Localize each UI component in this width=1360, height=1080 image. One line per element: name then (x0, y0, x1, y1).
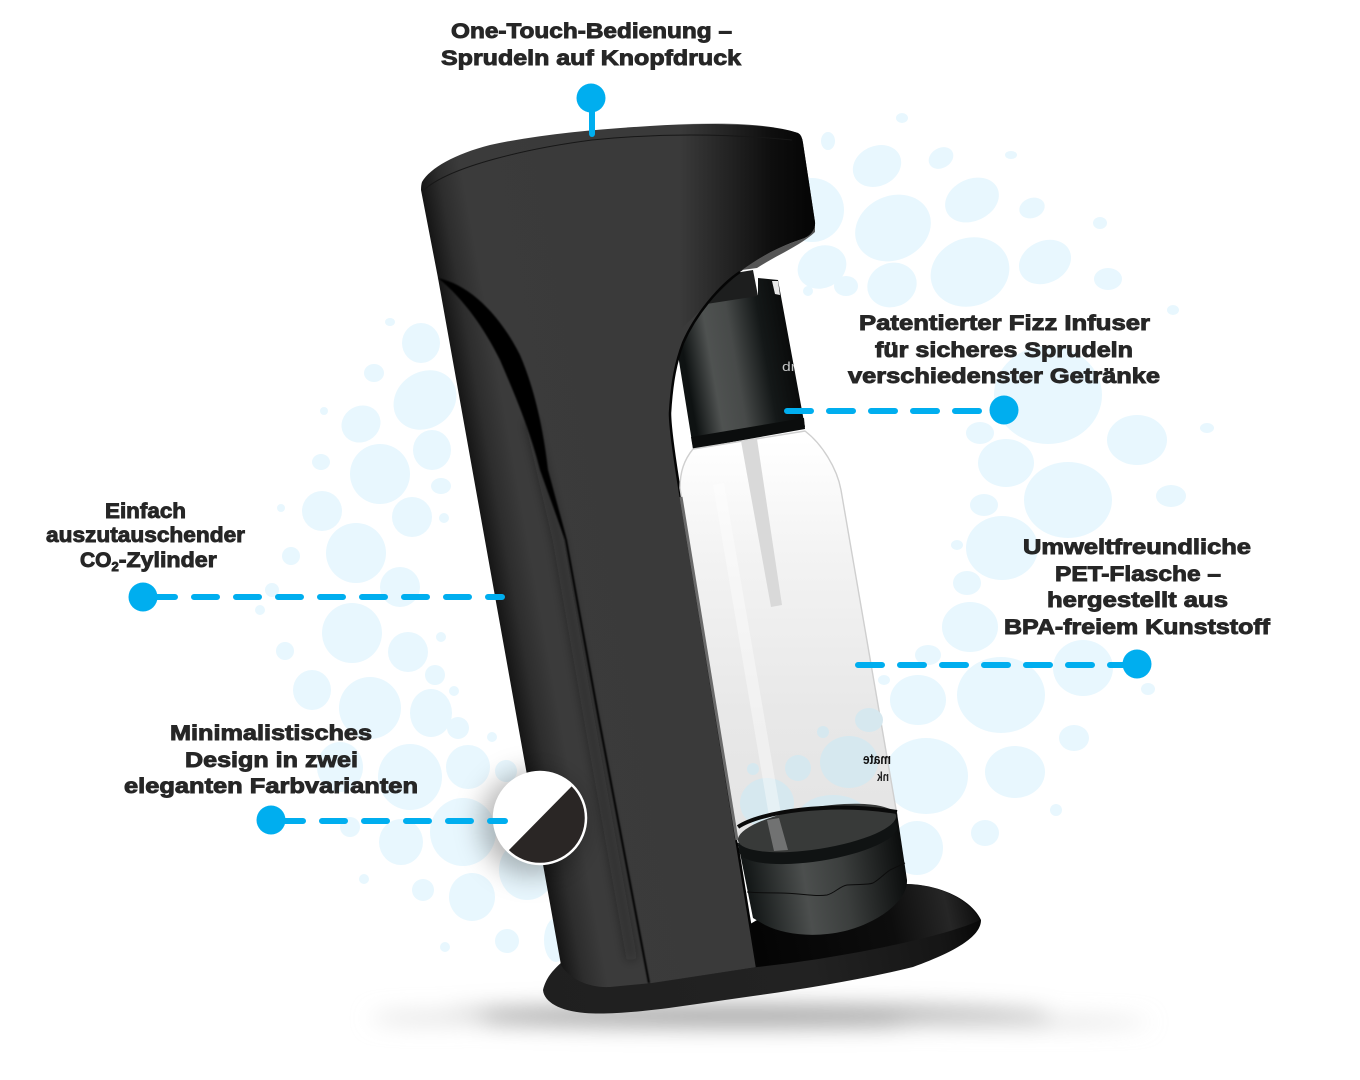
callout: PET bottle (858, 536, 1271, 678)
pointer: design (256, 806, 505, 834)
heading: design (124, 722, 418, 798)
bottle logo: nk (876, 769, 889, 784)
bottle logo (863, 751, 891, 784)
bottle glass (680, 431, 897, 842)
bubbles seen through glass (740, 708, 883, 839)
heading: PET bottle: Umweltfreundliche (1023, 536, 1251, 559)
cup dark band (736, 805, 900, 873)
heading: PET bottle: hergestellt aus (1047, 589, 1228, 612)
ground shadow (370, 1005, 1150, 1027)
bottom cup (738, 813, 907, 935)
bottle cap (678, 270, 805, 448)
heading: CO2 cylinder: Einfach (105, 500, 186, 523)
heading: fizz infuser: verschiedenster Getränke (848, 365, 1160, 388)
cup wave (747, 863, 905, 896)
heading: CO2 cylinder: CO (80, 549, 112, 572)
heading: one-touch: Sprudeln auf Knopfdruck (441, 47, 741, 70)
machine body (421, 124, 815, 987)
bottle inner edge strip (681, 497, 737, 840)
heading: design: Minimalistisches (170, 722, 372, 745)
inner tube (741, 439, 782, 607)
seam soft shadow (530, 420, 632, 960)
heading: fizz infuser: für sicheres Sprudeln (875, 339, 1133, 362)
callout: one-touch (441, 20, 741, 134)
heading: one-touch: One-Touch-Bedienung – (451, 20, 732, 43)
callout: CO2 cylinder (46, 500, 502, 612)
bottle (680, 431, 907, 935)
pointer: fizz infuser (787, 396, 1018, 424)
heading: design: eleganten Farbvarianten (124, 775, 418, 798)
product: soda machine (421, 123, 981, 1014)
base top surface (650, 884, 980, 983)
callout: fizz infuser (787, 312, 1160, 424)
heading: CO2 cylinder: -Zylinder (119, 549, 217, 572)
heading: PET bottle: PET-Flasche – (1055, 563, 1221, 586)
arch inner edge (670, 272, 757, 967)
head top seam (424, 135, 792, 190)
tube streak in lid (767, 818, 788, 851)
heading: CO2 cylinder: auszutauschender (46, 524, 245, 547)
heading: design: Design in zwei (185, 749, 358, 772)
pointer: PET bottle (858, 650, 1152, 678)
background bubbles: left cluster (255, 318, 568, 962)
heading: PET bottle (1004, 536, 1271, 639)
side seam (438, 278, 650, 983)
pointer: one-touch (576, 84, 606, 134)
colour swatch (480, 772, 590, 876)
heading: CO2 cylinder: 2 (112, 559, 119, 574)
pointer: CO2 cylinder (128, 582, 502, 612)
heading: PET bottle: BPA-freiem Kunststoff (1004, 616, 1271, 639)
background bubbles: right cluster (780, 113, 1214, 875)
machine base (543, 884, 981, 1014)
callout: design (124, 722, 505, 834)
glass highlight strip (713, 483, 782, 822)
head underside highlight (742, 226, 815, 270)
lid top rim (738, 808, 897, 827)
bottle cap: drink (782, 359, 817, 374)
bottle logo: mate (863, 751, 891, 768)
heading: CO2 cylinder (46, 500, 245, 574)
cup lid (735, 795, 899, 861)
heading: fizz infuser: Patentierter Fizz Infuser (859, 312, 1150, 335)
heading: fizz infuser (848, 312, 1160, 388)
head right shading (680, 123, 815, 330)
heading: one-touch (441, 20, 741, 70)
